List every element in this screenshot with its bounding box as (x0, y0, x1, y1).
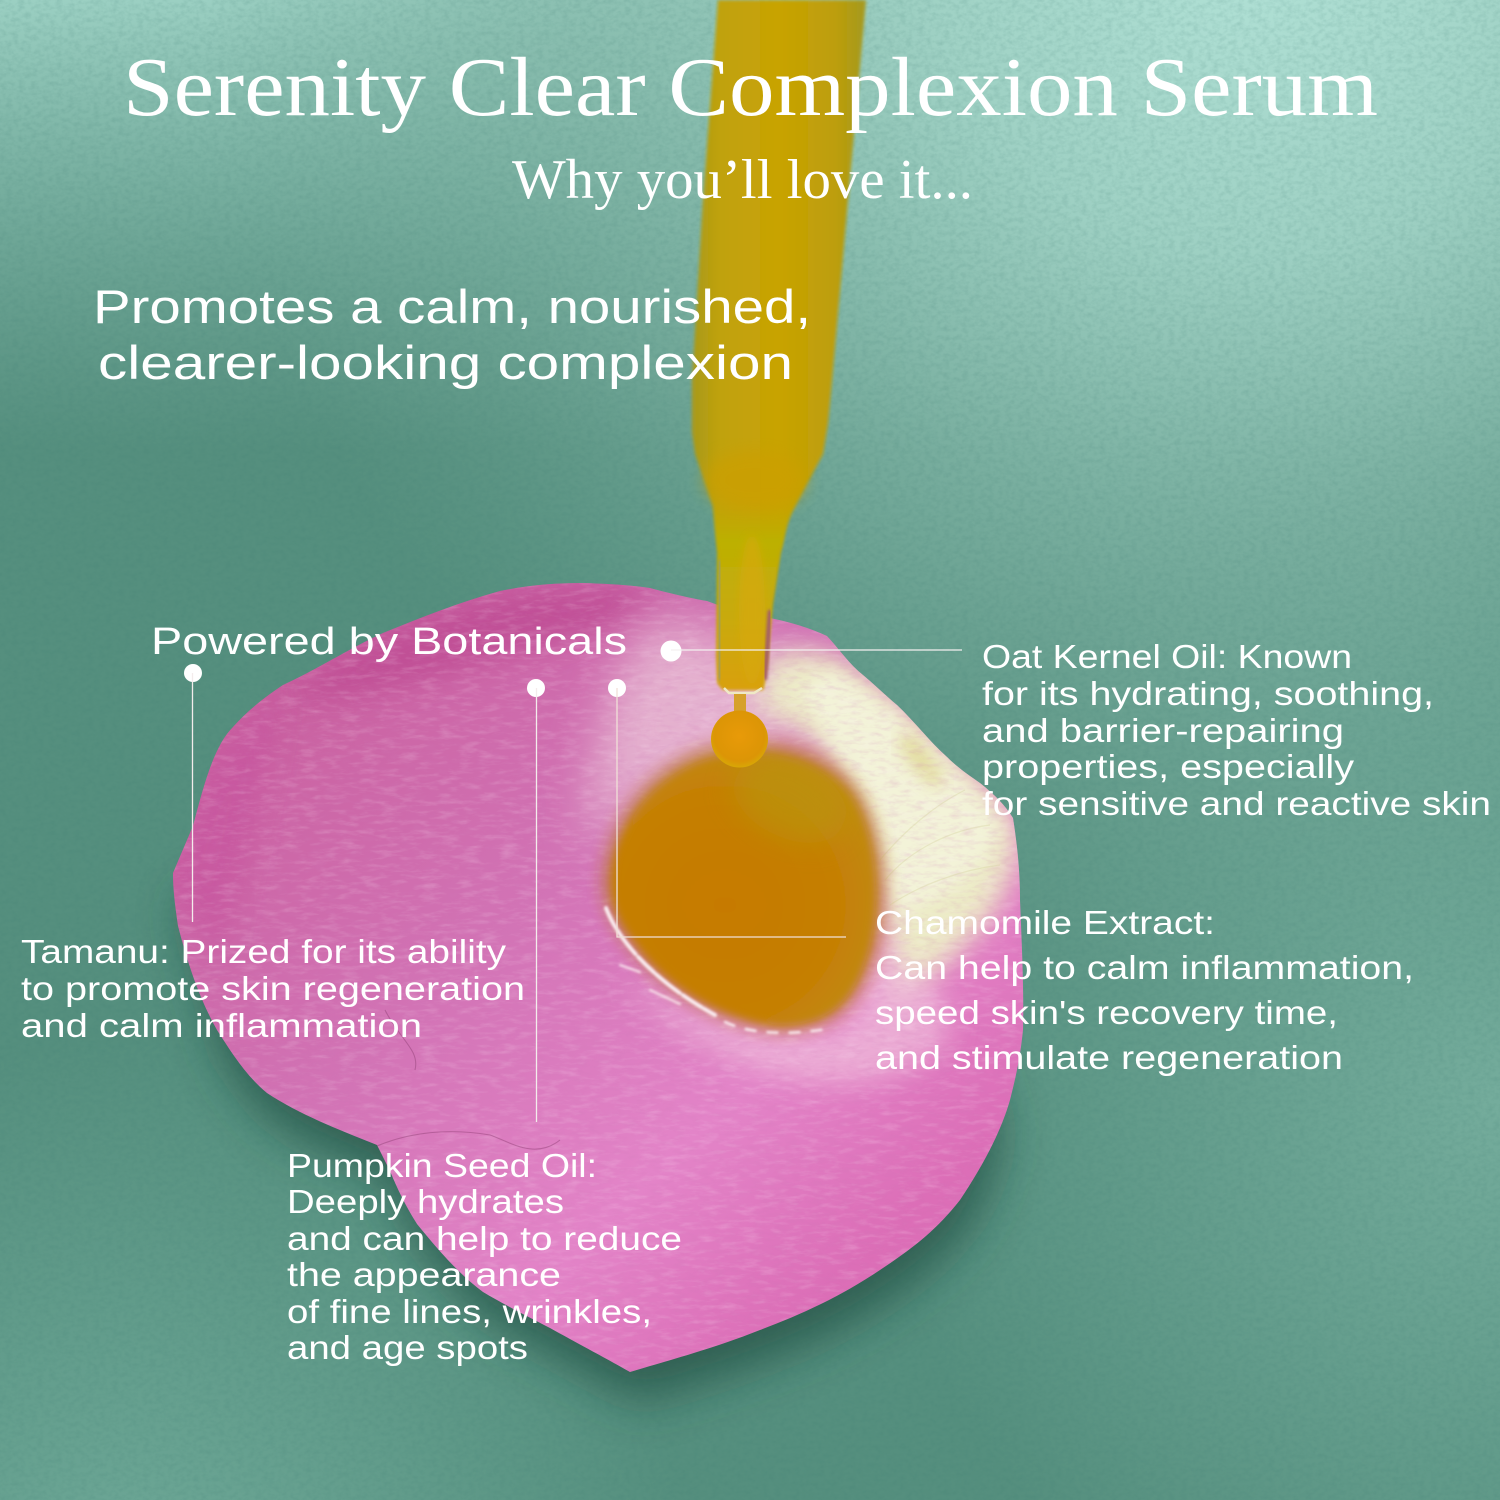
callout: tamanu: to promote skin regeneration (21, 971, 525, 1008)
white rim (606, 908, 832, 1033)
headline benefit: clearer-looking complexion (98, 336, 793, 389)
section heading: Powered by Botanicals (151, 621, 627, 663)
callout: tamanu (21, 664, 534, 1045)
callout: chamomile extract: Chamomile Extract: (875, 905, 1215, 942)
callout: pumpkin seed oil: of fine lines, wrinkles, (287, 1294, 652, 1331)
callout: pumpkin seed oil: Pumpkin Seed Oil: (287, 1148, 597, 1185)
callout: pumpkin seed oil: Deeply hydrates (287, 1184, 564, 1221)
pale pink upper centre (589, 620, 820, 850)
callout: oat kernel oil: Oat Kernel Oil: Known (982, 639, 1352, 676)
rose petal (150, 570, 1050, 1390)
headline benefit: Promotes a calm, nourished, (93, 280, 811, 333)
callout: oat kernel oil: properties, especially (982, 749, 1354, 786)
callout: oat kernel oil (660, 639, 1491, 823)
callout: oat kernel oil: and barrier-repairing (982, 713, 1344, 750)
petal creases (377, 1010, 560, 1149)
pale pink under pool (620, 950, 950, 1083)
callout: tamanu: Tamanu: Prized for its ability (21, 934, 506, 971)
callout: pumpkin seed oil: and age spots (287, 1330, 528, 1367)
callout: chamomile extract: Can help to calm inflammation, (875, 950, 1414, 987)
callout: pumpkin seed oil: the appearance (287, 1257, 561, 1294)
callout: oat kernel oil: for its hydrating, soothing, (982, 676, 1434, 713)
oil drop (711, 694, 768, 768)
callout: pumpkin seed oil: and can help to reduce (287, 1221, 682, 1258)
petal fan veins (880, 790, 1000, 905)
dark magenta upper rim (290, 585, 660, 700)
dropper (692, 0, 866, 768)
title: Serenity Clear Complexion Serum (123, 41, 1378, 134)
subtitle: Why you’ll love it... (512, 149, 973, 211)
callout: pumpkin seed oil (287, 679, 691, 1367)
callout: oat kernel oil: for sensitive and reactive skin (982, 786, 1491, 823)
callout: chamomile extract: speed skin's recovery time, (875, 995, 1338, 1032)
headline benefit (93, 280, 811, 389)
oil pool (603, 740, 885, 1033)
callout: chamomile extract: and stimulate regeneration (875, 1040, 1343, 1077)
callout: tamanu: and calm inflammation (21, 1008, 422, 1045)
cream lobe (755, 651, 1019, 1005)
petal shadow (181, 730, 1003, 1402)
callout: chamomile extract (608, 679, 1423, 1077)
